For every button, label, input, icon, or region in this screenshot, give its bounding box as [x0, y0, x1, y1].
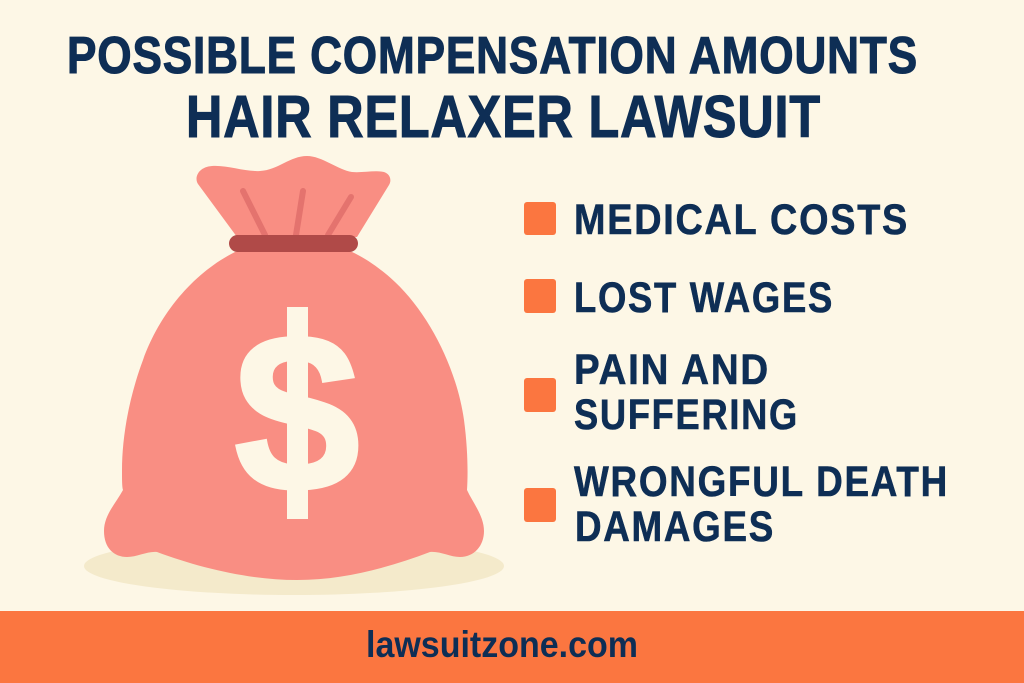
footer url: lawsuitzone.com: [366, 624, 638, 665]
item: pain and suffering: PAIN AND: [574, 346, 770, 394]
item: wrongful death damages: DAMAGES: [575, 503, 775, 551]
bag neck: [197, 156, 390, 237]
neck folds: [243, 191, 351, 235]
list: compensation categories: [524, 196, 949, 551]
dollar sign: $: [234, 286, 360, 539]
item: lost wages: LOST WAGES: [574, 274, 834, 322]
icon: money bag: [84, 156, 504, 595]
title: [67, 27, 918, 150]
item: wrongful death damages: WRONGFUL DEATH: [574, 458, 949, 506]
footer band: [0, 611, 1024, 683]
title: HAIR RELAXER LAWSUIT: [186, 84, 821, 150]
item: pain and suffering: SUFFERING: [574, 391, 799, 439]
item: wrongful death damages: [524, 458, 949, 551]
item: pain and suffering: [524, 346, 799, 439]
bag body: [104, 252, 484, 580]
bag tie: [229, 235, 358, 252]
item: medical costs: MEDICAL COSTS: [574, 196, 909, 244]
bag shadow: [84, 537, 504, 595]
